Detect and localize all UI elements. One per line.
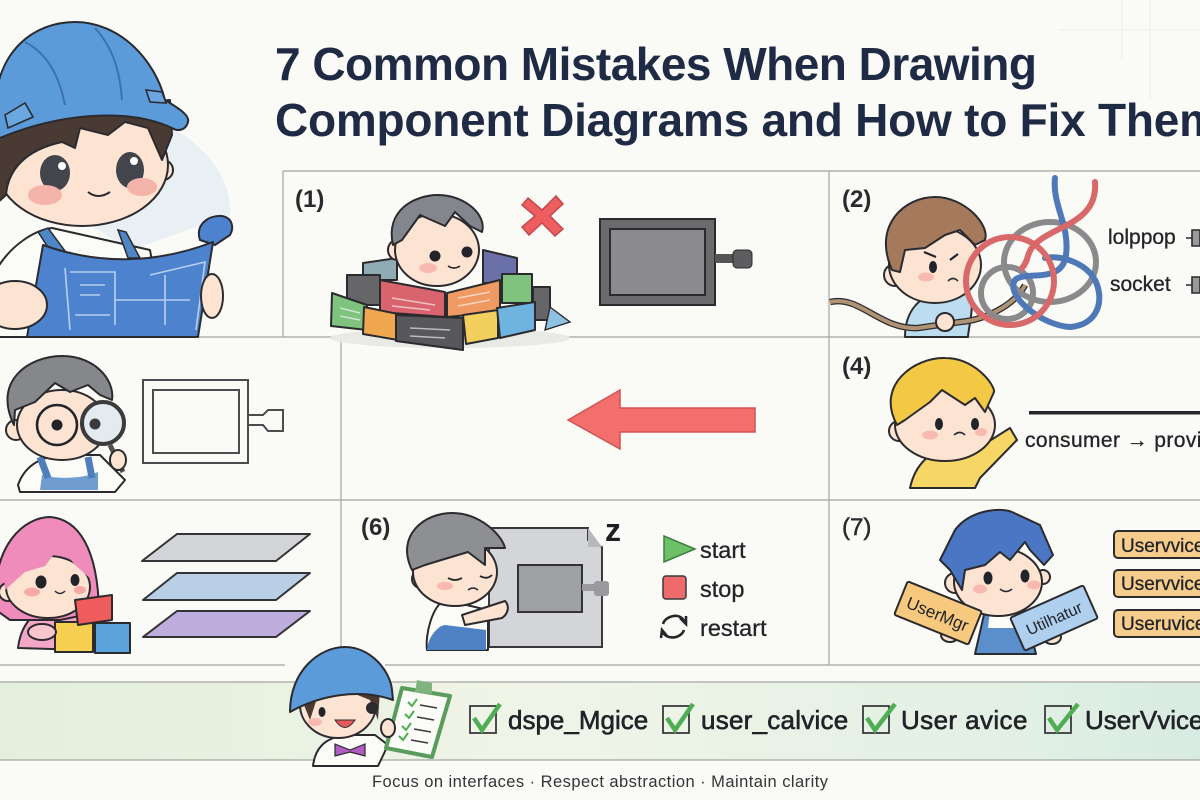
title: 7 Common Mistakes When Drawing xyxy=(275,38,1037,90)
yellow kid pointing xyxy=(889,358,1017,488)
icon: stop square xyxy=(663,576,686,599)
label restart: restart xyxy=(700,615,767,641)
kid with tangled cables xyxy=(830,178,1099,337)
pink kid with blocks xyxy=(0,517,130,653)
icon: start triangle xyxy=(664,536,695,562)
hero character with blueprint xyxy=(0,22,232,337)
mascot with clipboard xyxy=(290,647,450,766)
connection line xyxy=(1029,411,1200,414)
icon: socket plug xyxy=(1186,277,1200,293)
panel 5: layers xyxy=(0,517,310,653)
label start: start xyxy=(700,537,746,563)
component symbol outline xyxy=(143,380,283,463)
icon: lollipop plug xyxy=(1186,230,1200,246)
kid with magnifying glass xyxy=(6,356,126,492)
kid behind pile of blocks xyxy=(330,195,570,350)
panel 6: component lifecycle xyxy=(361,512,767,650)
blue-haired kid with name tags: UserMgr xyxy=(904,593,972,636)
check item 1: dspe_Mgice xyxy=(508,705,648,735)
title: Component Diagrams and How to Fix Them xyxy=(275,94,1200,146)
label socket: socket xyxy=(1110,273,1171,296)
panel 2: tangled connections xyxy=(830,178,1200,337)
label stop: stop xyxy=(700,576,744,602)
number 6: (6) xyxy=(361,514,390,541)
icon: sleeping z: z xyxy=(605,512,621,548)
number 2: (2) xyxy=(842,186,871,213)
check item 3: User avice xyxy=(901,705,1028,735)
check item 4: UserVvice xyxy=(1085,705,1200,735)
panel 4: direction of dependency xyxy=(842,353,1200,488)
sleeping kid hugging box xyxy=(407,513,508,650)
label lollipop: lolppop xyxy=(1108,226,1176,249)
number 7: (7) xyxy=(842,514,871,541)
icon: red cross xyxy=(522,196,563,236)
caption: Focus on interfaces · Respect abstraction · Maintain clarity xyxy=(372,773,829,791)
title xyxy=(275,38,1200,146)
centre arrow xyxy=(568,390,755,449)
blue-haired kid with name tags: Utilhatur xyxy=(1024,599,1086,639)
footer checklist band xyxy=(0,682,1200,760)
component symbol dark xyxy=(600,219,752,305)
check item 2: user_calvice xyxy=(701,705,849,735)
layered planes xyxy=(142,534,310,637)
icon: restart arrows xyxy=(661,616,686,638)
number 1: (1) xyxy=(295,186,324,213)
panel 1: monolithic component xyxy=(295,186,752,350)
number 4: (4) xyxy=(842,353,871,380)
component symbol grey xyxy=(489,528,609,647)
blue-haired kid with name tags xyxy=(894,510,1098,654)
panel 3: inspecting component xyxy=(6,356,283,492)
panel 7: naming xyxy=(842,510,1200,654)
